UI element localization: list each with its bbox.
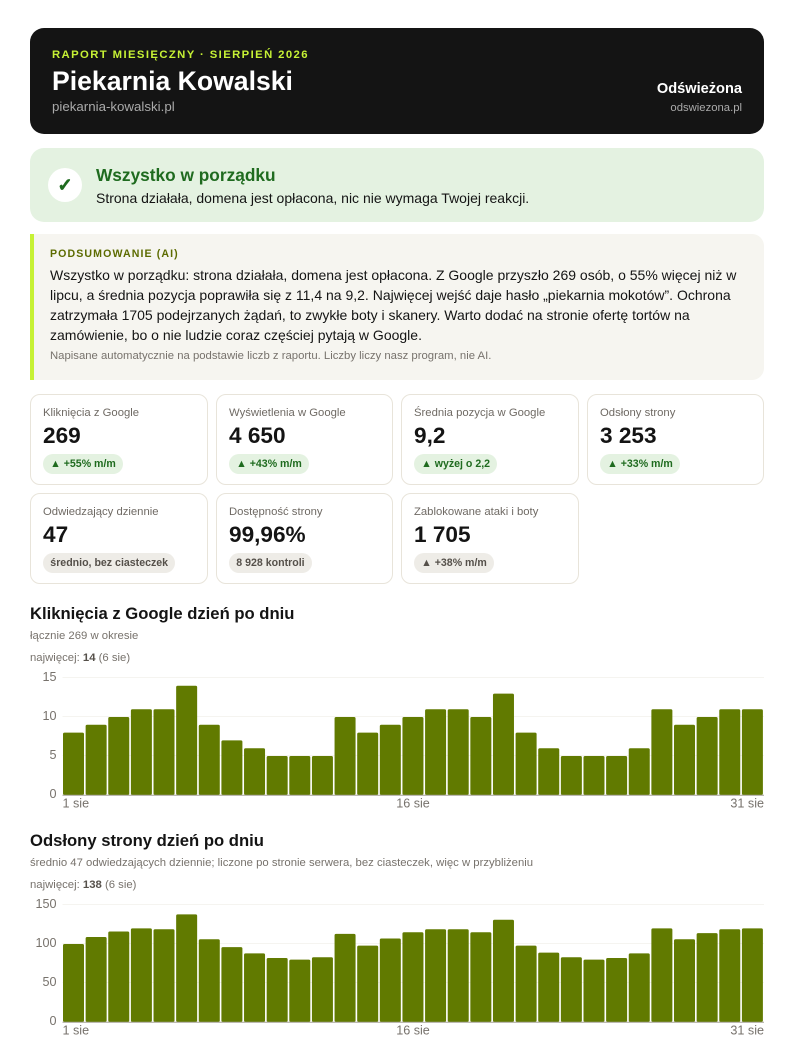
clicks chart subtitle: łącznie 269 w okresie bbox=[30, 630, 138, 642]
card: impressions: 4 650 bbox=[229, 423, 286, 448]
bar chart: daily clicks: 31 sie bbox=[730, 796, 764, 810]
company website: piekarnia-kowalski.pl bbox=[52, 99, 175, 114]
card: clicks: ▲ +55% m/m bbox=[50, 458, 116, 470]
card: uptime bbox=[216, 493, 393, 584]
status text: Strona działała, domena jest opłacona, nic nie wymaga Twojej reakcji. bbox=[96, 190, 529, 206]
summary label: PODSUMOWANIE (AI) bbox=[50, 248, 179, 260]
bar chart: daily clicks: 5 bbox=[49, 748, 56, 762]
bar chart: daily clicks: 15 bbox=[42, 670, 56, 684]
views chart subtitle: średnio 47 odwiedzających dziennie; liczone po stronie serwera, bez ciasteczek, więc w przybliżeniu bbox=[30, 856, 533, 868]
summary text: zamówienie, bo o nie ludzie coraz częściej pytają w Google. bbox=[50, 327, 422, 343]
company name: Piekarnia Kowalski bbox=[52, 66, 293, 96]
agency website: odswiezona.pl bbox=[670, 102, 742, 114]
status heading: Wszystko w porządku bbox=[96, 164, 276, 184]
card: position: Średnia pozycja w Google bbox=[414, 406, 545, 418]
bar chart: daily page views: 31 sie bbox=[730, 1024, 764, 1038]
bar chart: daily page views: 100 bbox=[35, 936, 56, 950]
bar chart: daily clicks: 16 sie bbox=[396, 796, 430, 810]
bar chart: daily page views: 50 bbox=[42, 975, 56, 989]
card: position: ▲ wyżej o 2,2 bbox=[421, 458, 490, 470]
views chart peak note: najwięcej: 138 (6 sie) bbox=[30, 878, 136, 890]
card: uptime: 8 928 kontroli bbox=[236, 557, 305, 569]
status panel bbox=[30, 148, 764, 222]
bar chart: daily clicks: 10 bbox=[42, 709, 56, 723]
summary text: Wszystko w porządku: strona działała, domena jest opłacona. Z Google przyszło 269 osób, o 55% więcej niż w bbox=[50, 266, 736, 282]
header panel bbox=[30, 28, 764, 134]
views chart heading: Odsłony strony dzień po dniu bbox=[30, 830, 264, 850]
icon: check mark: ✓ bbox=[57, 175, 73, 195]
card: clicks: 269 bbox=[43, 423, 81, 448]
card: blocked attacks: ▲ +38% m/m bbox=[421, 557, 487, 569]
card: page views bbox=[587, 394, 764, 485]
card: impressions: Wyświetlenia w Google bbox=[229, 406, 346, 418]
card: impressions bbox=[216, 394, 393, 485]
card: daily visitors: 47 bbox=[43, 522, 68, 547]
panel: AI summary bbox=[30, 234, 764, 380]
bar chart: daily page views: 0 bbox=[49, 1014, 56, 1028]
summary text: zatrzymała 1705 podejrzanych żądań, to zwykłe boty i skanery. Warto dodać na stronie ofertę tortów na bbox=[50, 307, 690, 323]
clicks chart peak note: najwięcej: 14 (6 sie) bbox=[30, 652, 130, 664]
card: daily visitors: średnio, bez ciasteczek bbox=[50, 557, 168, 569]
summary footnote: Napisane automatycznie na podstawie liczb z raportu. Liczby liczy nasz program, nie AI. bbox=[50, 350, 491, 362]
icon: check mark bbox=[48, 168, 82, 202]
accent bar bbox=[30, 234, 34, 380]
card: page views: ▲ +33% m/m bbox=[607, 458, 673, 470]
card: position bbox=[401, 394, 579, 485]
summary text: lipcu, a średnia pozycja poprawiła się z 11,4 na 9,2. Najwięcej wejść daje hasło „piekarnia mokotów”. Ochrona bbox=[50, 287, 731, 303]
clicks chart heading: Kliknięcia z Google dzień po dniu bbox=[30, 604, 294, 622]
card: daily visitors: Odwiedzający dziennie bbox=[43, 506, 159, 518]
card: page views: 3 253 bbox=[600, 423, 657, 448]
card: page views: Odsłony strony bbox=[600, 406, 675, 418]
bar chart: daily clicks: 0 bbox=[49, 787, 56, 801]
card: daily visitors bbox=[30, 493, 208, 584]
bar chart: daily page views: 150 bbox=[35, 897, 56, 911]
agency name: Odświeżona bbox=[657, 81, 742, 97]
report period label: RAPORT MIESIĘCZNY · SIERPIEŃ 2026 bbox=[52, 48, 309, 60]
bar chart: daily page views: 1 sie bbox=[62, 1024, 89, 1038]
bar chart: daily page views: 16 sie bbox=[396, 1024, 430, 1038]
card: impressions: ▲ +43% m/m bbox=[236, 458, 302, 470]
card: uptime: 99,96% bbox=[229, 522, 306, 547]
card: blocked attacks bbox=[401, 493, 579, 584]
summary text bbox=[50, 266, 736, 343]
card: blocked attacks: 1 705 bbox=[414, 522, 471, 547]
card: position: 9,2 bbox=[414, 423, 445, 448]
card: blocked attacks: Zablokowane ataki i boty bbox=[414, 506, 538, 518]
card: clicks: Kliknięcia z Google bbox=[43, 406, 139, 418]
bar chart: daily clicks: 1 sie bbox=[62, 796, 89, 810]
card: uptime: Dostępność strony bbox=[229, 506, 323, 518]
card: clicks bbox=[30, 394, 208, 485]
